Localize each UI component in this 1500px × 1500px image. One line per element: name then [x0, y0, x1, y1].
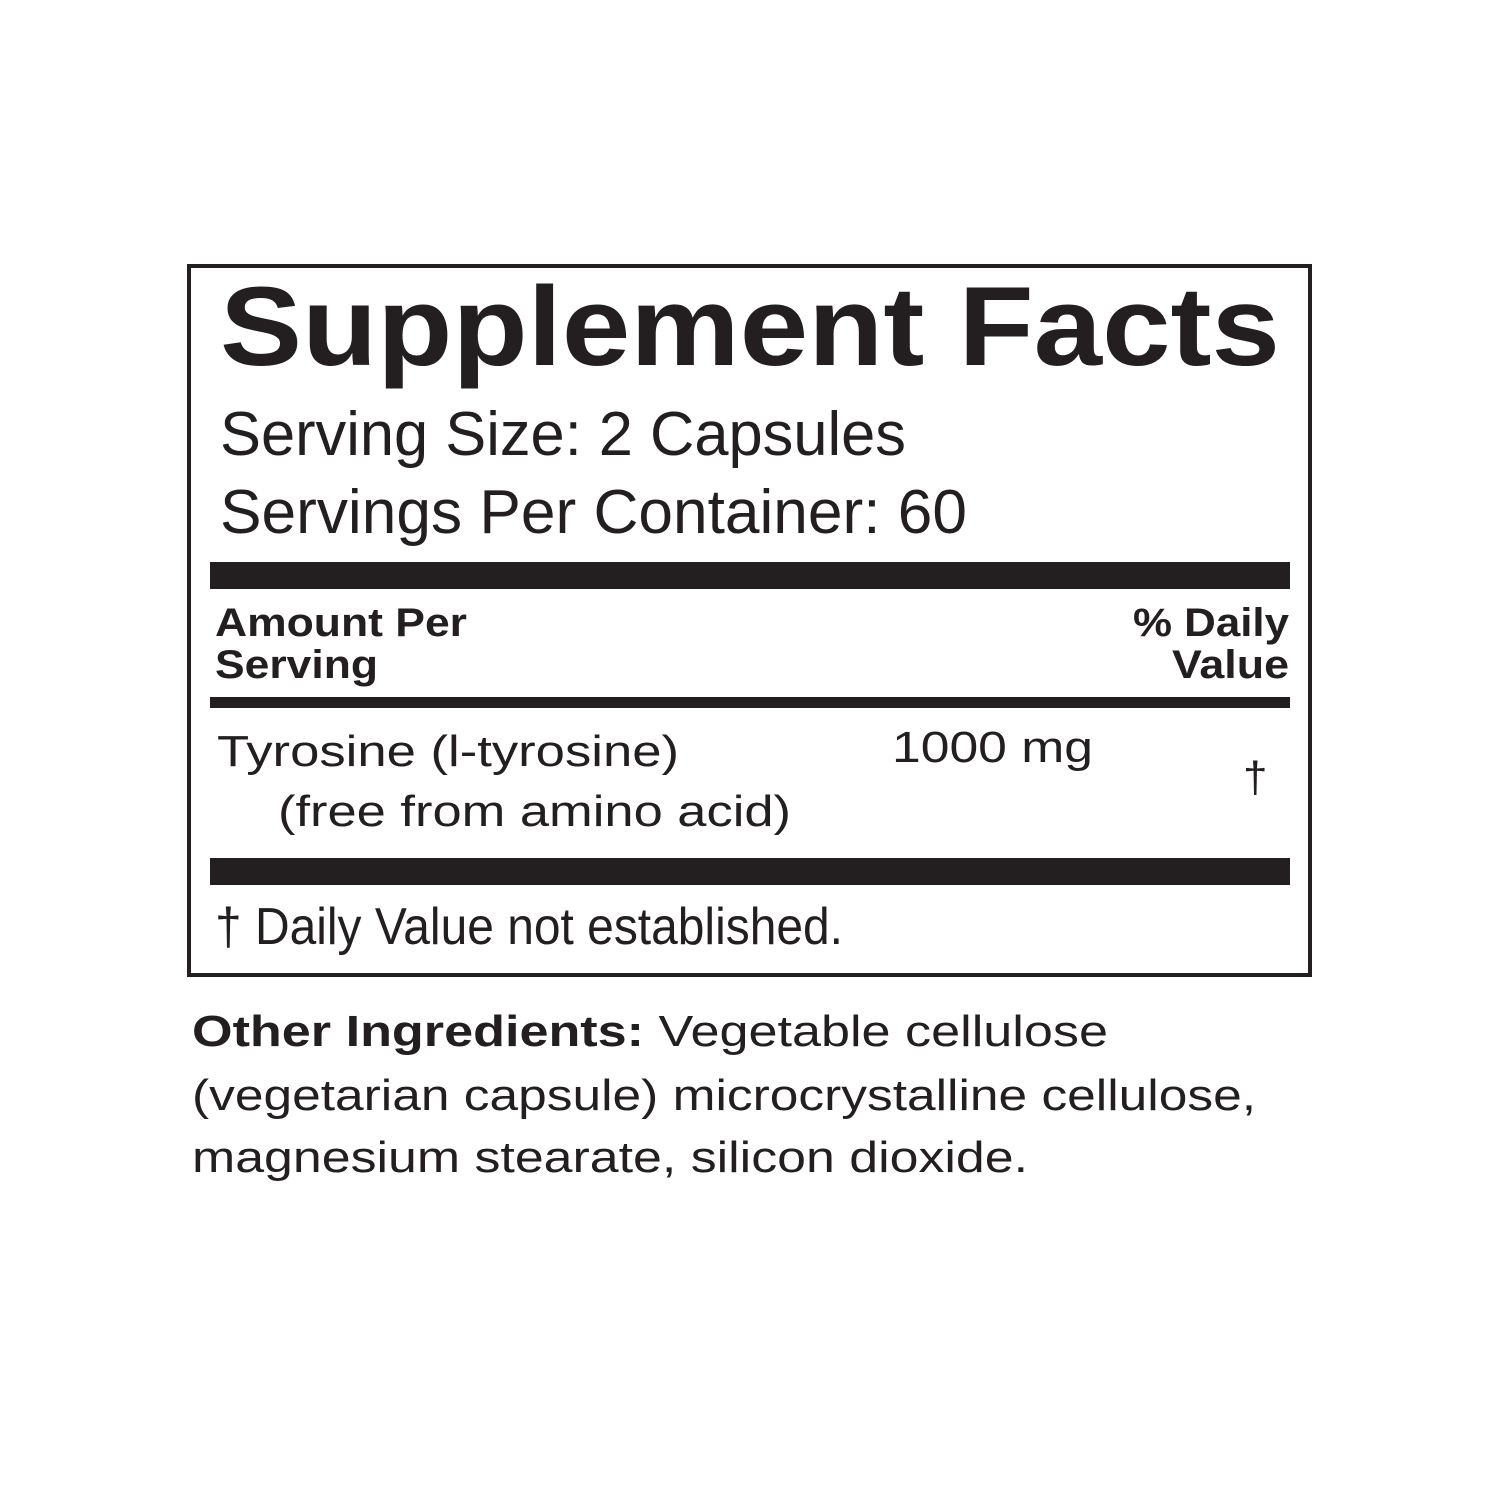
- ingredient row: tyrosine: †: [1243, 753, 1267, 802]
- ingredient row: tyrosine: [217, 723, 1267, 836]
- header: daily value: Value: [1172, 643, 1289, 687]
- other ingredients text: [192, 1007, 1256, 1182]
- footnote: † Daily Value not established.: [215, 898, 843, 956]
- header: daily value: [1133, 601, 1290, 687]
- other ingredients text: (vegetarian capsule) microcrystalline cellulose,: [192, 1071, 1256, 1120]
- title: Supplement Facts: [220, 264, 1280, 389]
- other ingredients text: magnesium stearate, silicon dioxide.: [192, 1133, 1028, 1182]
- serving size: Serving Size: 2 Capsules: [220, 400, 906, 469]
- servings per container: Servings Per Container: 60: [220, 478, 967, 547]
- other ingredients text: Other Ingredients: Vegetable cellulose: [192, 1007, 1108, 1056]
- header: amount per serving: Serving: [215, 643, 378, 687]
- header: amount per serving: Amount Per: [215, 601, 467, 645]
- ingredient row: tyrosine: Tyrosine (l-tyrosine): [217, 727, 679, 776]
- ingredient row: tyrosine: 1000 mg: [892, 723, 1093, 772]
- header: daily value: % Daily: [1133, 601, 1290, 645]
- panel: supplement facts box: [189, 264, 1310, 975]
- header: amount per serving: [215, 601, 467, 687]
- ingredient row: tyrosine: (free from amino acid): [278, 787, 791, 836]
